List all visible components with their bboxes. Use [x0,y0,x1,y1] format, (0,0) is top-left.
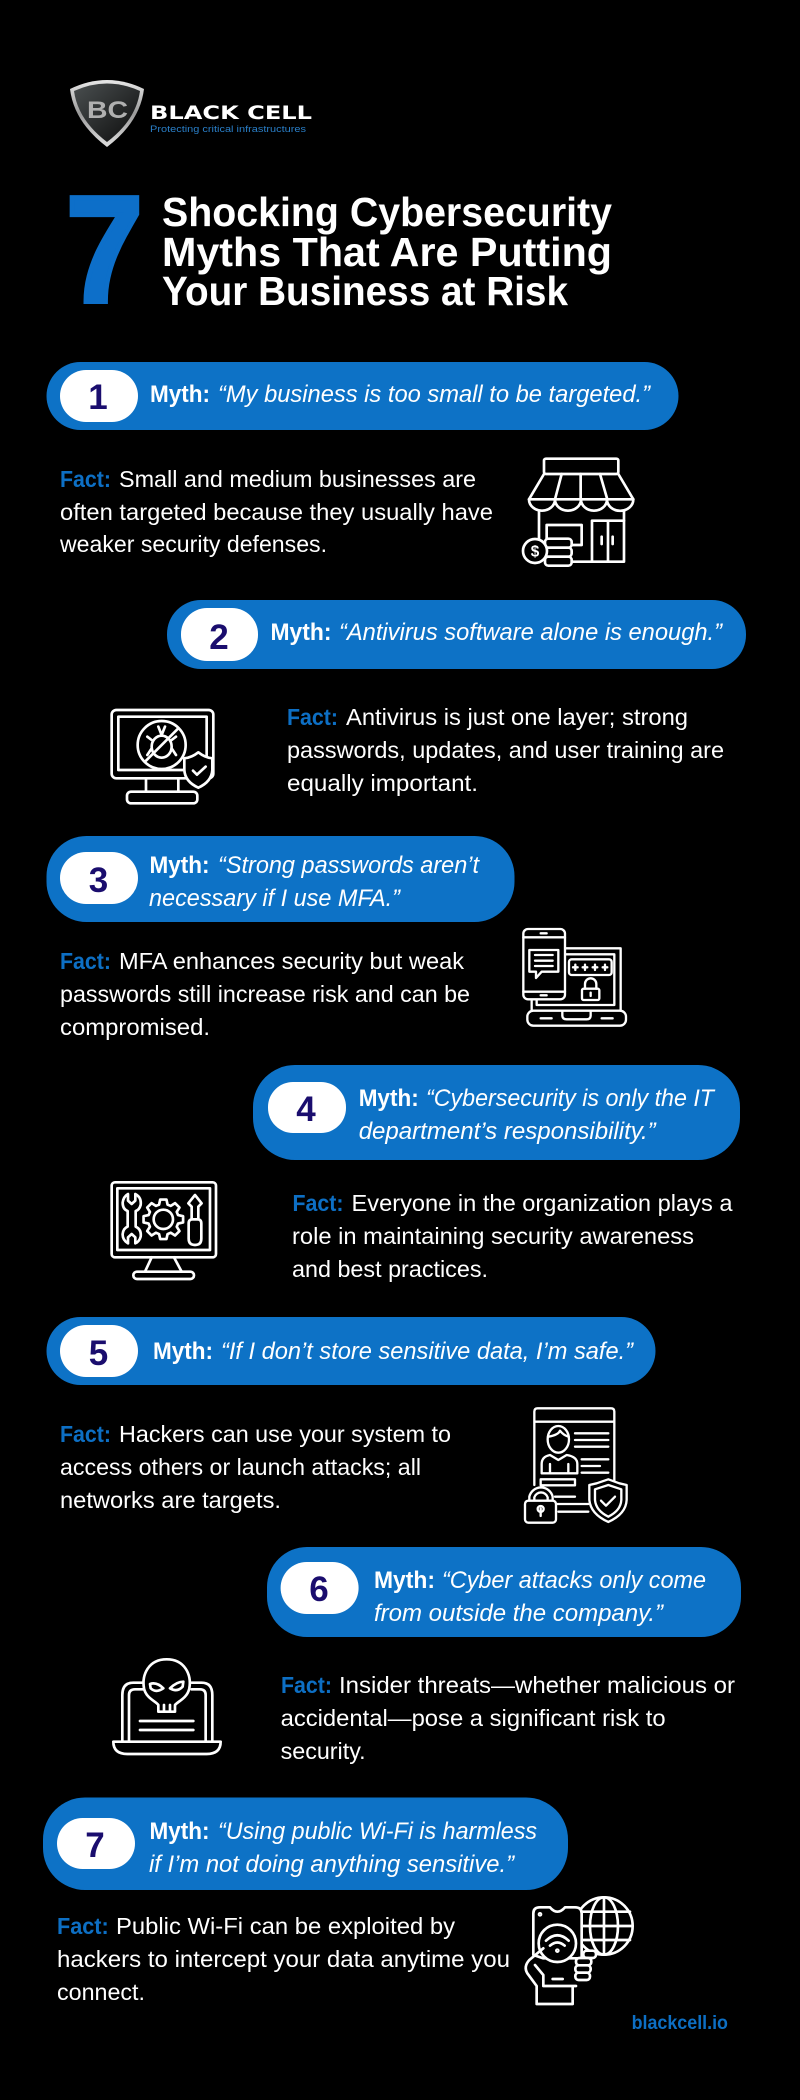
fact 6: accidental—pose a significant risk to [281,1705,666,1731]
fact 5 [60,1421,451,1513]
myth pill 6: from outside the company.” [374,1600,664,1627]
myth pill 5: 5 [89,1334,108,1373]
myth pill 5: “If I don’t store sensitive data, I’m safe.” [221,1338,634,1365]
myth pill 4 [253,1065,740,1160]
panel: myth 1 [46,362,678,566]
icon: storefront: $ [531,543,540,560]
myth pill 3: necessary if I use MFA.” [149,885,401,912]
fact 7: connect. [57,1979,145,2005]
fact 5: Fact: [60,1421,111,1447]
fact 6 [281,1672,735,1764]
fact 4: Everyone in the organization plays a [352,1190,733,1216]
myth pill 7: Myth: [150,1818,210,1845]
myth pill 2: 2 [209,618,229,657]
myth pill 3 [46,836,514,922]
myth pill 1: 1 [88,378,108,417]
myth pill 2 [167,600,746,669]
fact 2: Antivirus is just one layer; strong [346,704,688,730]
icon: profile document with lock and shield [525,1408,627,1523]
panel: myth 7 [43,1798,728,2034]
website: blackcell.io [632,2013,728,2034]
fact 4: role in maintaining security awareness [292,1223,694,1249]
title text: Myths That Are Putting [162,229,612,275]
myth pill 2: “Antivirus software alone is enough.” [339,619,723,646]
panel: myth 5 [46,1317,656,1523]
fact 2: passwords, updates, and user training are [287,737,724,763]
tagline: Protecting critical infrastructures [150,124,307,134]
myth pill 7: 7 [85,1826,105,1865]
fact 7 [57,1913,510,2005]
icon: monitor with blocked bug and shield [112,710,213,803]
icon: phone and laptop with password [523,929,626,1026]
fact 2: equally important. [287,770,478,796]
fact 7: Public Wi-Fi can be exploited by [116,1913,456,1939]
fact 4 [292,1190,733,1282]
fact 6: Insider threats—whether malicious or [339,1672,735,1698]
brand name: BLACK CELL [150,102,312,124]
myth pill 4: Myth: [359,1085,419,1112]
myth pill 5 [46,1317,656,1385]
icon: hand holding phone with Wi-Fi and globe [526,1897,633,2004]
panel: myth 6 [113,1547,741,1764]
fact 5: Hackers can use your system to [119,1421,451,1447]
myth pill 2: Myth: [270,619,332,646]
myth pill 4: “Cybersecurity is only the IT [426,1085,716,1112]
fact 1: Small and medium businesses are [119,466,476,492]
fact 7: Fact: [57,1913,109,1939]
myth pill 3: Myth: [150,852,210,879]
fact 2: Fact: [287,704,338,730]
fact 3: compromised. [60,1014,210,1040]
fact 3: passwords still increase risk and can be [60,981,470,1007]
myth pill 7: “Using public Wi-Fi is harmless [218,1818,537,1845]
myth pill 1 [46,362,678,430]
logo: Black Cell [70,80,312,147]
fact 3: Fact: [60,948,111,974]
panel: myth 2 [112,600,746,803]
title text: Shocking Cybersecurity [162,189,612,235]
fact 3 [60,948,470,1040]
myth pill 6: “Cyber attacks only come [442,1567,706,1594]
myth pill 6: 6 [309,1570,329,1609]
fact 4: Fact: [292,1190,344,1216]
fact 1: often targeted because they usually have [60,499,493,525]
myth pill 4: department’s responsibility.” [359,1118,657,1145]
title text: Your Business at Risk [162,268,568,314]
fact 7: hackers to intercept your data anytime you [57,1946,510,1972]
fact 6: Fact: [281,1672,332,1698]
fact 3: MFA enhances security but weak [119,948,465,974]
myth pill 6 [267,1547,741,1637]
myth pill 5: Myth: [153,1338,213,1365]
icon: shield [70,80,144,147]
myth pill 7: if I’m not doing anything sensitive.” [149,1851,515,1878]
icon: laptop with skull [113,1659,221,1754]
fact 6: security. [281,1738,366,1764]
icon: shield: BC [87,97,128,124]
myth pill 1: Myth: [150,381,210,408]
title text [162,189,612,314]
fact 2 [287,704,724,796]
myth pill 3: “Strong passwords aren’t [218,852,480,879]
fact 4: and best practices. [292,1256,488,1282]
fact 5: access others or launch attacks; all [60,1454,421,1480]
myth pill 3: 3 [89,861,108,900]
icon: storefront [523,459,633,566]
fact 5: networks are targets. [60,1487,281,1513]
myth pill 6: Myth: [374,1567,435,1594]
title [66,164,612,334]
myth pill 1: “My business is too small to be targeted.” [218,381,651,408]
fact 1: weaker security defenses. [59,531,327,557]
myth pill 7 [43,1798,568,1890]
panel: myth 3 [46,836,626,1040]
icon: monitor with tools [112,1182,216,1279]
fact 1 [59,466,493,557]
fact 1: Fact: [60,466,111,492]
big numeral 7: 7 [66,164,143,334]
panel: myth 4 [112,1065,740,1282]
myth pill 4: 4 [296,1090,316,1129]
